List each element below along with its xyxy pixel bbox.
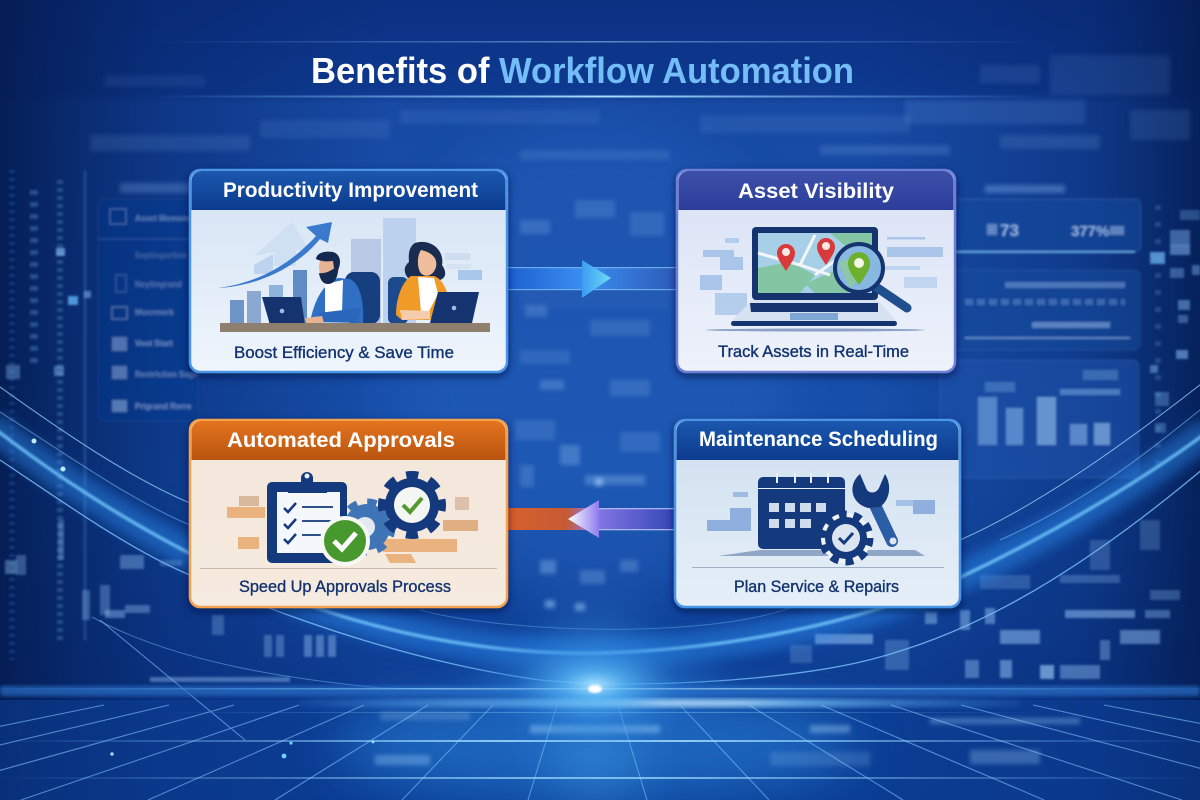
panel header: Maintenance Scheduling [699,428,938,451]
centre data columns [515,200,670,611]
panel header: Productivity Improvement [223,179,478,202]
icon: green check badge [320,516,370,566]
horizon glow [0,615,1200,800]
icon: gear with check [821,513,871,563]
panel caption: Track Assets in Real-Time [718,343,909,361]
panel header [192,171,506,210]
panel header [192,421,506,460]
right dashboard panels [940,199,1141,478]
panel header [678,171,954,210]
panel: productivity improvement [190,170,507,372]
icon: light blue gear [343,503,391,551]
panel: automated approvals [190,420,507,607]
panel: maintenance scheduling [675,420,960,607]
person: woman with laptop [388,242,479,324]
panel header: Asset Visibility [738,180,894,203]
arrow: maintenance to approvals [505,500,677,538]
left dashboard panel: Neytingrand [135,280,182,289]
upper data band [90,55,1190,193]
left dashboard panel: Prigrand Rorre [135,402,192,411]
panel caption: Plan Service & Repairs [734,578,899,596]
panel header: Automated Approvals [227,429,455,452]
lower data blocks [5,520,1180,682]
illustration: clipboard and gears [200,472,497,569]
light arcs [0,377,1200,692]
left dashboard panel: Voot Start [135,339,173,348]
title: Benefits of Workflow Automation [311,50,854,91]
panel caption: Boost Efficiency & Save Time [234,344,454,362]
person: man with laptop [262,252,380,326]
illustration: team and growth chart [218,218,490,332]
floor grid [0,620,1200,800]
left dashboard panel [98,199,199,421]
icon: red pin [777,244,795,271]
panel caption: Speed Up Approvals Process [239,578,451,596]
icon: wrench [852,474,896,544]
left dashboard panel: Restriction Sage [135,370,199,379]
illustration: calendar wrench and gear [692,473,944,568]
icon: magnifier with green pin [835,244,907,308]
icon: dark gear with check [382,475,442,535]
left dashboard panel: Septingartion [135,251,187,260]
panel: asset visibility [677,170,955,372]
left dashboard panel: Asset Momons [135,214,192,223]
right dashboard panels: 73 [1000,221,1019,240]
arrow: productivity to asset visibility [505,260,679,298]
data streaks left and right [6,170,1200,660]
desk [220,323,490,332]
icon: red pin [817,238,835,265]
left dashboard panel: Monrmerk [135,308,174,317]
panel header [676,421,958,460]
illustration: laptop map and magnifier [700,227,943,332]
right dashboard panels: 377% [1071,223,1109,240]
